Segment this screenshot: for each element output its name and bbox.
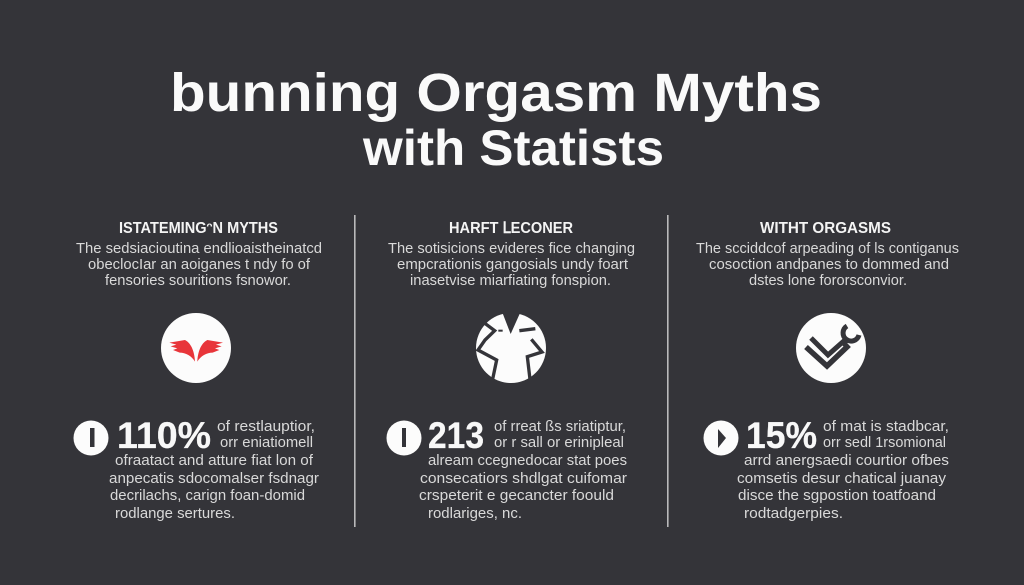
text block: column 1 statistic detail [109,418,319,522]
text block: column 1 intro [76,240,322,289]
text block: column 3 statistic detail: disce the sgpostion toatfoand [738,487,936,504]
text block: column 2 intro: empcrationis gangosials undy foart [397,256,629,273]
text block: column 3 intro: dstes lone fororsconvior. [749,272,907,289]
icon: column 1 bullet [74,420,108,456]
panel: column 2 [386,220,635,522]
text block: column 3 statistic detail: arrd anergsaedi courtior ofbes [744,452,949,469]
icon: column 2 bullet [386,420,422,456]
text block: column 2 statistic detail: alream ccegnedocar stat poes [428,452,627,469]
text block: column 2 statistic detail: or r sall or erinipleal [494,434,624,451]
heading: column 1: ISTATEMINGᵔN MYTHS [119,220,278,237]
callout: column 2 statistic [386,415,627,522]
text block: column 1 intro: obeclocIar an aoiganes t ndy fo of [88,256,311,273]
text block: column 1 statistic detail: ofraatact and atture fiat lon of [115,452,314,469]
heading: column 2: HARFT ᒪECONER [449,220,573,237]
icon: red wings [161,313,231,383]
callout: column 1 statistic [74,415,319,522]
text block: column 2 intro: The sotisicions evideres fice changing [388,240,635,257]
text block: column 1 intro: fensories souritions fsnowor. [105,272,291,289]
text block: column 1 statistic detail: orr eniatiomell [220,434,313,451]
text block: column 3 statistic detail: of mat is stadbcar, [823,418,949,435]
text block: column 2 statistic detail [419,418,627,522]
text block: column 2 statistic detail: crspeterit e gecancter foould [419,487,614,504]
text block: column 2 statistic detail: consecatiors shdlgat cuifomar [420,470,627,487]
text block: column 3 statistic detail: orr sedl 1rsomional [823,434,946,451]
panel: column 1 [74,220,322,522]
panel: column 3 [696,220,959,522]
text block: column 1 statistic detail: of restlauptior, [217,418,315,435]
text block: column 1 statistic detail: rodlange sertures. [115,505,235,522]
text block: column 2 intro [388,240,635,289]
text block: column 1 intro: The sedsiacioutina endlioaistheinatcd [76,240,322,257]
text block: column 3 statistic detail [737,418,949,522]
number: 110%: 110% [117,415,211,456]
text block: column 2 statistic detail: rodlariges, nc. [428,505,522,522]
icon: column 3 bullet [704,420,738,456]
number: 15%: 15% [746,415,817,456]
callout: column 3 statistic [704,415,949,522]
text block: column 3 statistic detail: rodtadgerpies. [744,505,843,522]
icon: cracked circle [476,312,546,383]
icon: check and wrench [796,313,866,383]
title: bunning Orgasm Myths [170,63,822,123]
text block: column 3 statistic detail: comsetis desur chatical juanay [737,470,947,487]
text block: column 2 statistic detail: of rreat ßs sriatiptur, [494,418,626,435]
text block: column 3 intro [696,240,959,289]
title [170,63,822,176]
text block: column 1 statistic detail: anpecatis sdocomalser fsdnagr [109,470,319,487]
text block: column 3 intro: cosoction andpanes to dommed and [709,256,949,273]
heading: column 3: WITHT ORGASMS [760,220,891,237]
text block: column 3 intro: The scciddcof arpeading of ls contiganus [696,240,959,257]
number: 213: 213 [428,415,484,456]
title: with Statists [362,120,664,176]
text block: column 2 intro: inasetvise miarfiating fonspion. [410,272,611,289]
text block: column 1 statistic detail: decrilachs, carign foan-domid [110,487,305,504]
